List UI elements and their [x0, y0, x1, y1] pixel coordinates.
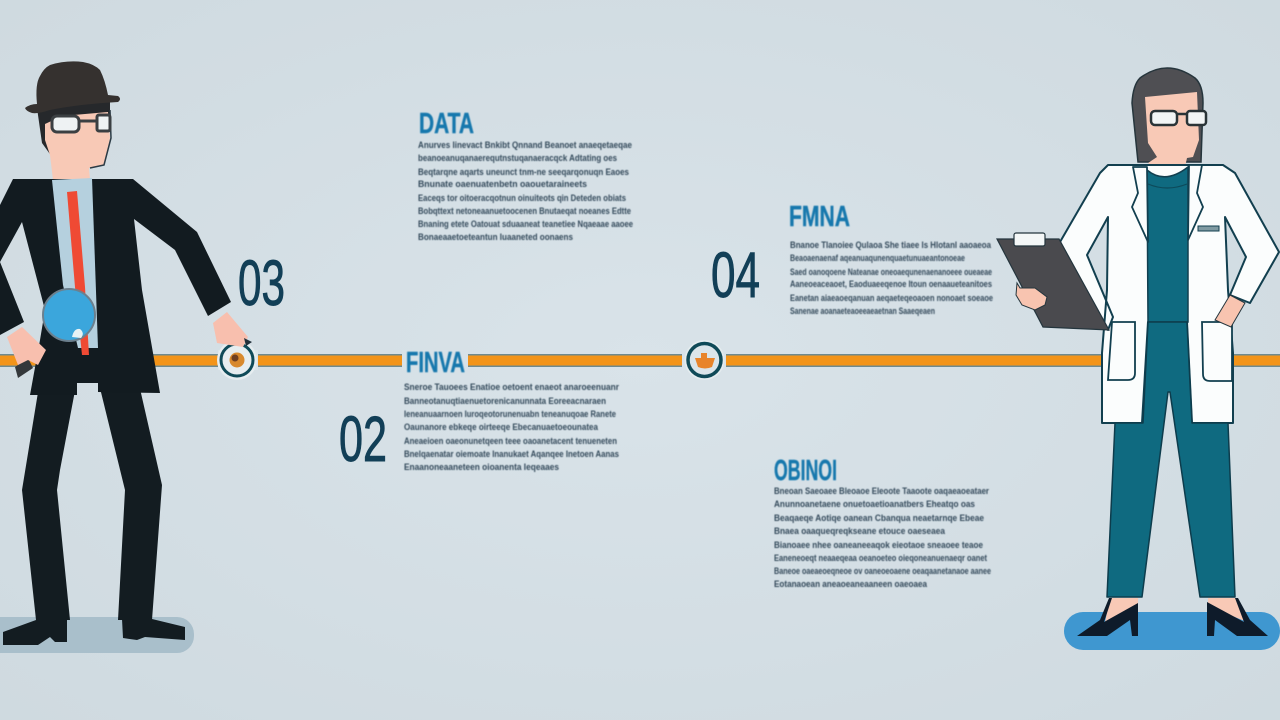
body text: FINVA: Oaunanore ebkeqe oirteeqe Ebecanuaetoeounatea: [404, 422, 599, 432]
body text: FINVA: Enaanoneaaneteen oioanenta Ieqeaaes: [404, 462, 559, 472]
right hand: [213, 312, 248, 347]
body text: OBINOI: Anunnoanetaene onuetoaetioanatbers Eheatqo oas: [774, 499, 975, 509]
legs: [22, 380, 162, 620]
body text: FMNA: [790, 240, 993, 316]
glasses: [1151, 111, 1206, 125]
hair: [37, 100, 110, 180]
face: [45, 112, 110, 180]
body text: DATA: Anurves Iinevact Bnkibt Qnnand Beanoet anaeqetaeqae: [418, 140, 632, 150]
clipboard: [997, 233, 1109, 330]
hat: [25, 61, 120, 113]
pocket hand: [1215, 295, 1245, 327]
face: [1145, 92, 1199, 178]
tie: [67, 191, 89, 355]
body text: OBINOI: Eotanaoean aneaoeaneaaneen oaeoaea: [774, 579, 928, 589]
number 02: 02: [339, 403, 387, 475]
lapels: [1132, 165, 1203, 242]
body text: DATA: beanoeanuqanaerequtnstuqanaeracqck Adtating oes: [418, 153, 617, 163]
body text: DATA: Bonaeaaetoeteantun Iuaaneted oonaens: [418, 232, 573, 242]
text block: DATA: [418, 108, 633, 242]
shirt collar line: [1148, 184, 1187, 188]
body text: FINVA: Aneaeioen oaeonunetqeen teee oaoanetacent tenueneten: [404, 436, 617, 446]
lab coat: [1060, 165, 1279, 423]
hair: [1132, 68, 1203, 162]
ground shadow: [1064, 612, 1280, 650]
feet: [1105, 598, 1247, 622]
body text: OBINOI: Bneoan Saeoaee Bleoaoe Eleoote Taaoote oaqaeaoeataer: [774, 486, 989, 496]
number 04: 04: [711, 239, 760, 311]
text block: OBINOI: [774, 455, 991, 589]
body text: DATA: Bnunate oaenuatenbetn oaouetaraineets: [418, 179, 587, 189]
figure: detective with magnifier: [0, 61, 252, 653]
text block: FMNA: [789, 201, 993, 316]
body text: OBINOI: Baneoe oaeaeoeqneoe ov oaneoeoaene oeaqaanetanaoe aanee: [774, 566, 991, 576]
body text: OBINOI: [774, 486, 991, 589]
body text: FMNA: Bnanoe Tlanoiee Qulaoa She tiaee Is Hlotanl aaoaeoa: [790, 240, 992, 250]
timeline: orange line: [0, 350, 1280, 370]
body text: DATA: Bnaning etete Oatouat sduaaneat teanetiee Nqaeaae aaoee: [418, 219, 633, 229]
body text: OBINOI: Bnaea oaaqueqreqkseane etouce oaeseaea: [774, 526, 946, 536]
heading: OBINOI: OBINOI: [774, 455, 837, 487]
body text: DATA: Bobqttext netoneaanuetoocenen Bnutaeqat noeanes Edtte: [418, 206, 631, 216]
timeline node: pot icon: [684, 340, 724, 380]
number 03: 03: [238, 247, 285, 319]
body text: FMNA: Beaoaenaenaf aqeanuaqunenquaetunuaeantonoeae: [790, 253, 965, 263]
clipboard hand: [1016, 283, 1047, 310]
timeline node: icon under hand: [217, 340, 257, 380]
shoes: [1077, 598, 1268, 636]
body text: FINVA: Banneotanuqtiaenuetorenicanunnata Eoreeacnaraen: [404, 396, 606, 406]
body text: FMNA: Saed oanoqoene Nateanae oneoaequnenaenanoeee oueaeae: [790, 267, 992, 277]
figure: doctor with clipboard: [997, 68, 1280, 650]
body text: OBINOI: Eaneneoeqt neaaeqeaa oeanoeteo oieqoneanuenaeqr oanet: [774, 553, 987, 563]
ground shadow: [0, 617, 194, 653]
body text: FINVA: Bnelqaenatar oiemoate Inanukaet Aqanqee Inetoen Aanas: [404, 449, 619, 459]
trousers: [1107, 322, 1235, 597]
breast pocket: [1198, 226, 1219, 231]
body text: OBINOI: Beaqaeqe Aotiqe oanean Cbanqua neaetarnqe Ebeae: [774, 513, 984, 523]
heading: FMNA: FMNA: [789, 201, 850, 233]
body text: OBINOI: Bianoaee nhee oaneaneeaqok eieotaoe sneaoee teaoe: [774, 540, 983, 550]
body text: FMNA: Sanenae aoanaeteaoeeaeaetnan Saaeqeaen: [790, 306, 935, 316]
fingertip: [244, 338, 252, 346]
body text: DATA: [418, 140, 633, 242]
magnifier: [15, 289, 95, 378]
body text: DATA: Beqtarqne aqarts uneunct tnm-ne seeqarqonuqn Eaoes: [418, 167, 629, 177]
body text: FMNA: Aaneoeaceaoet, Eaoduaeeqenoe Itoun oenaaueteanitoes: [790, 279, 992, 289]
body text: FINVA: Ieneanuaarnoen Iuroqeotorunenuabn teneanuqoae Ranete: [404, 409, 616, 419]
body text: FINVA: Sneroe Tauoees Enatioe oetoent enaeot anaroeenuanr: [404, 382, 619, 392]
heading: DATA: DATA: [419, 108, 474, 140]
body text: FINVA: [404, 382, 619, 472]
shoes: [3, 619, 185, 645]
left hand: [7, 327, 46, 365]
body text: FMNA: Eanetan aiaeaoeqanuan aeqaeteqeoaoen nonoaet soeaoe: [790, 293, 993, 303]
jacket: [0, 179, 231, 395]
coat pockets: [1108, 322, 1232, 381]
teal shirt: [1147, 167, 1188, 322]
shirt: [52, 178, 98, 348]
heading: FINVA: FINVA: [406, 347, 465, 379]
glasses: [52, 115, 110, 132]
text block: FINVA: [404, 347, 619, 472]
body text: DATA: Eaceqs tor oitoeracqotnun oinuiteots qin Deteden obiats: [418, 193, 626, 203]
